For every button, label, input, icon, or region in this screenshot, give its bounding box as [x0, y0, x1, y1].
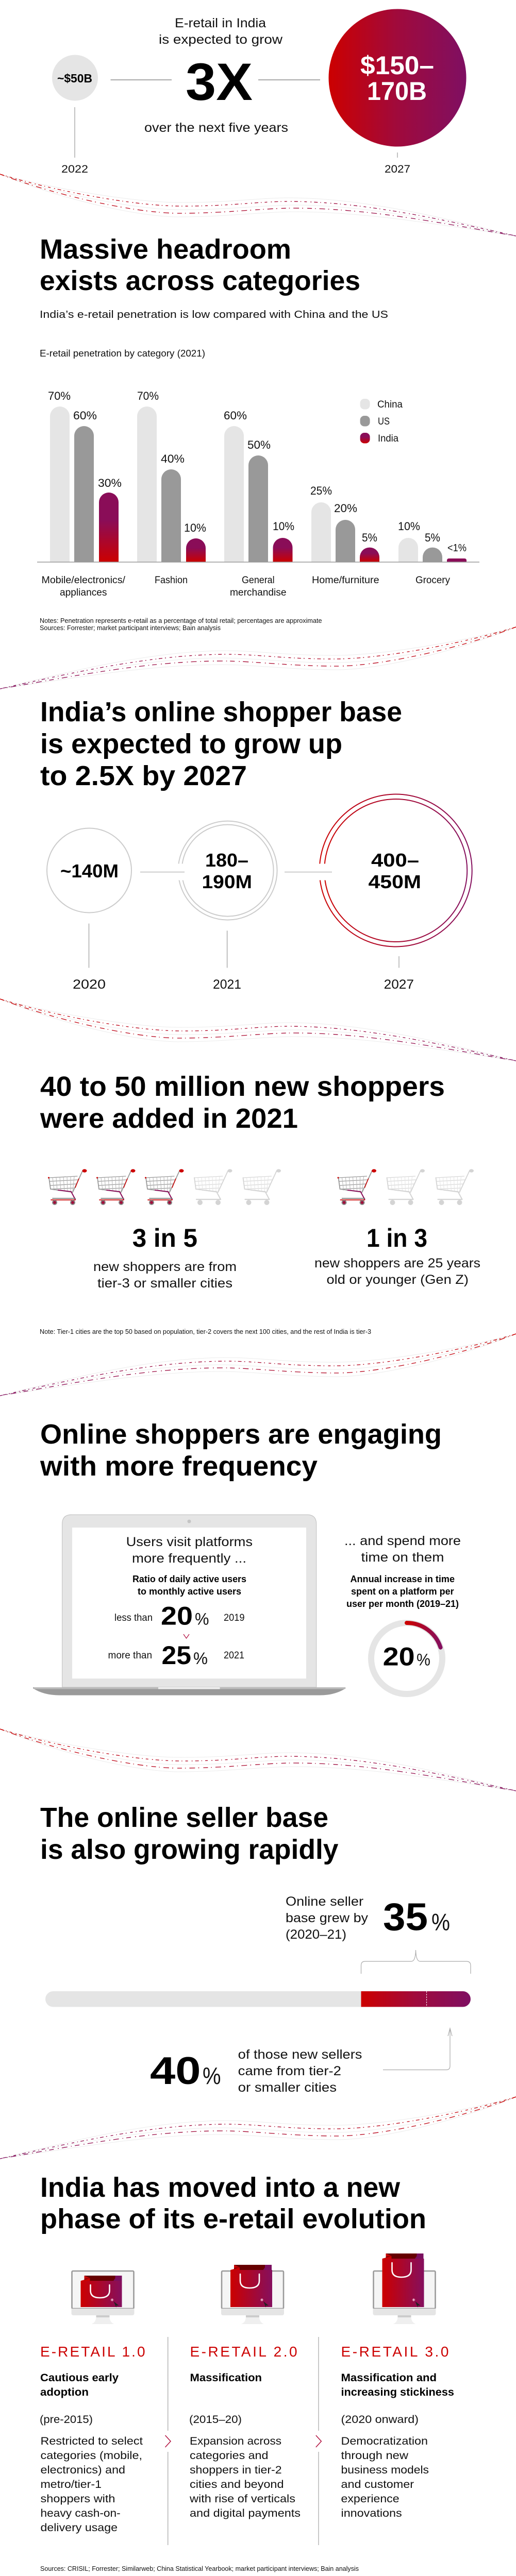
circle: 2020 [47, 828, 131, 913]
divider with arrow: 1.0 to 2.0 [165, 2337, 171, 2545]
description: categories (mobile, [40, 2450, 142, 2462]
year marker: 2027 [385, 152, 410, 175]
stat: 2021 ratio: more than [108, 1650, 152, 1661]
year marker: 2022 [61, 107, 88, 175]
circle: 2027 market size [329, 9, 466, 146]
text: seller growth: (2020–21) [286, 1927, 346, 1942]
legend: China [377, 399, 403, 410]
bars: general merchandise: 60% [224, 409, 247, 422]
heading: 40 to 50 million new shoppers [40, 1071, 445, 1102]
bars: fashion [137, 389, 206, 562]
legend [360, 399, 403, 444]
heading [40, 2172, 426, 2234]
subheading: cautious early adoption: Cautious early [40, 2372, 119, 2384]
heading: is also growing rapidly [40, 1834, 338, 1865]
text block: growth intro: E-retail in India [175, 16, 266, 30]
text block: visit frequency: Users visit platforms [126, 1535, 253, 1549]
stat: 35% [383, 1895, 450, 1939]
circle: 2027: 400– [371, 850, 419, 871]
bars: general merchandise: 10% [273, 520, 294, 533]
icon: monitor with large bag [373, 2253, 436, 2324]
heading [40, 234, 360, 296]
icon: monitor with medium bag [221, 2265, 284, 2324]
bars: general merchandise [224, 409, 294, 562]
label: e-retail 2.0: E-RETAIL 2.0 [190, 2344, 297, 2360]
description: through new [341, 2450, 409, 2462]
text: five years: over the next five years [144, 121, 288, 135]
text: tier-2 sellers: or smaller cities [238, 2080, 337, 2095]
category labels: Mobile/electronics/ [41, 575, 126, 586]
text block: time spent: time on them [361, 1550, 444, 1565]
stat: 3 in 5: 3 in 5 [132, 1224, 197, 1252]
stat: 2019 ratio: 2019 [224, 1613, 244, 1623]
bars: general merchandise: 50% [247, 438, 271, 451]
chart title: E-retail penetration by category (2021) [40, 348, 205, 359]
heading: India’s online shopper base [40, 697, 402, 727]
text block: time spent: spent on a platform per [351, 1586, 454, 1597]
category labels: Fashion [155, 575, 188, 586]
stat: 1 in 3: new shoppers are 25 years [314, 1256, 480, 1270]
panel: online shopper base [40, 697, 472, 992]
description [341, 2435, 429, 2519]
progress bar [45, 1991, 471, 2007]
year marker: 2021 [213, 930, 241, 992]
category labels: Home/furniture [312, 575, 379, 586]
panel: new shoppers [40, 1071, 480, 1335]
text block: growth intro: is expected to grow [159, 32, 283, 47]
circle: 2021: 180– [205, 850, 248, 871]
stat: 35%: % [431, 1909, 450, 1936]
panel: e-retail evolution [40, 2172, 454, 2572]
circle: 2021 [175, 821, 277, 920]
panel: 3X market growth [52, 9, 466, 175]
description: electronics) and [40, 2464, 125, 2476]
circle: 2027: 450M [368, 871, 421, 892]
bars: grocery: 10% [398, 520, 420, 533]
label: e-retail 3.0: E-RETAIL 3.0 [341, 2344, 448, 2360]
stat: 1 in 3: old or younger (Gen Z) [327, 1273, 469, 1287]
notes and sources: Sources: Forrester; market participant interviews; Bain analysis [40, 624, 221, 632]
text block: visit frequency: to monthly active users [138, 1586, 241, 1597]
text: seller growth: base grew by [286, 1911, 369, 1925]
bars: fashion: 70% [137, 389, 159, 402]
bars: mobile/electronics/appliances [48, 389, 122, 562]
connector: 2020 to 2021 [140, 872, 185, 873]
description: Democratization [341, 2435, 428, 2447]
donut chart: 20% [371, 1623, 442, 1694]
icon: 1 of 3 carts highlighted [337, 1169, 474, 1205]
description: Expansion across [190, 2435, 281, 2447]
arrow: chevron down [184, 1634, 189, 1638]
icon: 3 of 5 carts highlighted [48, 1169, 281, 1205]
description: shoppers with [40, 2493, 115, 2505]
period: (2015–20) [189, 2414, 242, 2426]
text block: time spent: user per month (2019–21) [346, 1599, 459, 1609]
stat: 1 in 3 [314, 1224, 480, 1287]
text block: visit frequency: more frequently ... [132, 1551, 246, 1566]
category labels: appliances [60, 587, 107, 598]
category labels: Grocery [415, 575, 450, 586]
stat: 2019 ratio [114, 1602, 244, 1631]
heading: The online seller base [40, 1802, 328, 1833]
subheading: cautious early adoption: adoption [40, 2386, 89, 2398]
subheading: massification and stickiness [341, 2372, 454, 2398]
description: experience [341, 2493, 400, 2505]
bars: grocery: 5% [425, 531, 440, 544]
subheading: massification: Massification [190, 2372, 262, 2384]
text block: time spent: ... and spend more [344, 1534, 461, 1548]
description: and digital payments [190, 2507, 301, 2519]
stat: 2021 ratio: % [193, 1649, 208, 1668]
description: delivery usage [40, 2522, 118, 2534]
heading: India has moved into a new [40, 2172, 401, 2203]
stat: 3 in 5 [93, 1224, 237, 1291]
column: e-retail 1.0 [40, 2271, 145, 2534]
text block: growth intro [159, 16, 283, 47]
description [189, 2435, 301, 2519]
circle: 2022 market size [52, 55, 98, 101]
subheading: massification and stickiness: Massification and [341, 2372, 437, 2384]
circle: 2027 [317, 794, 472, 947]
connector: left [110, 79, 172, 80]
bars: fashion: 10% [184, 521, 206, 534]
bars: home/furniture [310, 484, 379, 562]
description [40, 2435, 143, 2534]
circle: 2027 market size: 170B [367, 77, 427, 106]
bars: grocery: <1% [447, 543, 467, 554]
note: Note: Tier-1 cities are the top 50 based on population, tier-2 covers the next 100 cities, and the rest of India is tier-3 [40, 1328, 371, 1335]
connector: 2021 to 2027 [285, 872, 332, 873]
year marker: 2022: 2022 [61, 163, 88, 175]
description: metro/tier-1 [40, 2479, 102, 2490]
bars: home/furniture: 20% [334, 502, 357, 515]
stat: 2019 ratio: 20 [161, 1602, 193, 1631]
bars: mobile/electronics/appliances: 30% [98, 477, 122, 489]
big number: 3X: 3X [186, 53, 253, 111]
year marker: 2020: 2020 [73, 977, 106, 992]
heading [40, 697, 402, 791]
stat: 2021 ratio [108, 1641, 244, 1670]
subheading: India’s e-retail penetration is low compared with China and the US [40, 309, 388, 320]
heading: were added in 2021 [40, 1103, 298, 1134]
circle: 2022 market size: ~$50B [57, 72, 92, 85]
year marker: 2021: 2021 [213, 977, 241, 992]
category labels [41, 575, 450, 598]
description: business models [341, 2464, 429, 2476]
description: shoppers in tier-2 [190, 2464, 282, 2476]
heading: phase of its e-retail evolution [40, 2204, 426, 2234]
stat: 3 in 5: tier-3 or smaller cities [97, 1276, 232, 1291]
stat: 35%: 35 [383, 1895, 428, 1939]
heading: Online shoppers are engaging [40, 1419, 442, 1450]
year marker: 2020 [73, 924, 106, 992]
label: e-retail 1.0: E-RETAIL 1.0 [40, 2344, 145, 2360]
description: cities and beyond [190, 2479, 284, 2490]
bars: home/furniture: 25% [310, 484, 332, 497]
bracket [361, 1950, 471, 1974]
stat: 40%: 40 [150, 2049, 201, 2092]
text: seller growth [286, 1894, 369, 1942]
icon: monitor with small bag [71, 2271, 134, 2324]
stat: 2021 ratio: 25 [162, 1641, 191, 1670]
category labels: merchandise [230, 587, 287, 598]
text block: time spent [344, 1534, 461, 1609]
column: e-retail 3.0 [341, 2253, 454, 2519]
bars: home/furniture: 5% [362, 531, 377, 544]
year marker: 2027 [384, 956, 414, 992]
column: e-retail 2.0 [189, 2265, 301, 2519]
heading: to 2.5X by 2027 [40, 760, 247, 791]
divider with arrow: 2.0 to 3.0 [316, 2337, 321, 2545]
legend: US [378, 416, 390, 427]
text block: time spent: Annual increase in time [351, 1574, 455, 1584]
description: Restricted to select [40, 2435, 143, 2447]
heading: is expected to grow up [40, 728, 342, 759]
description: heavy cash-on- [40, 2507, 121, 2519]
text block: visit frequency: Ratio of daily active users [132, 1574, 246, 1584]
stat: 2021 ratio: 2021 [224, 1650, 244, 1661]
description: with rise of verticals [189, 2493, 295, 2505]
stat: 2019 ratio: less than [114, 1613, 153, 1623]
bars: mobile/electronics/appliances: 60% [73, 409, 97, 422]
notes and sources: Notes: Penetration represents e-retail as a percentage of total retail; percentages are approximate [40, 617, 322, 624]
circle: 2021: 190M [202, 871, 252, 892]
heading: exists across categories [40, 265, 360, 296]
panel: engagement frequency [33, 1419, 461, 1695]
text block: visit frequency [126, 1535, 253, 1597]
heading: with more frequency [40, 1451, 318, 1482]
sources: Sources: CRISIL; Forrester; Similarweb; China Statistical Yearbook; market participant interviews; Bain analysis [40, 2565, 359, 2572]
connector: right [258, 79, 320, 80]
period: (2020 onward) [341, 2414, 419, 2426]
donut chart: 20%: % [417, 1651, 430, 1669]
text: tier-2 sellers: of those new sellers [238, 2047, 362, 2062]
description: and customer [341, 2479, 414, 2490]
panel: seller base [40, 1802, 471, 2095]
icon: laptop [33, 1515, 345, 1695]
category labels: General [242, 575, 275, 586]
subheading: cautious early adoption [40, 2372, 119, 2398]
stat: 40%: % [203, 2062, 221, 2089]
heading [40, 1071, 445, 1134]
heading [40, 1802, 338, 1865]
legend: India [378, 433, 398, 444]
bars: mobile/electronics/appliances: 70% [48, 389, 71, 402]
description: categories and [190, 2450, 268, 2462]
text: tier-2 sellers: came from tier-2 [238, 2064, 341, 2078]
donut chart: 20%: 20 [383, 1642, 415, 1671]
stat: 2019 ratio: % [195, 1610, 209, 1629]
circle: 2020: ~140M [60, 860, 119, 882]
subheading: massification and stickiness: increasing stickiness [341, 2386, 454, 2398]
bar chart [37, 389, 479, 598]
year marker: 2027: 2027 [385, 163, 410, 175]
heading: Massive headroom [40, 234, 291, 265]
text: tier-2 sellers [238, 2047, 362, 2095]
bars: grocery [398, 520, 467, 562]
heading [40, 1419, 442, 1482]
circle: 2027 market size: $150– [360, 51, 434, 80]
notes and sources [40, 617, 322, 632]
panel: headroom by category [37, 234, 479, 632]
year marker: 2027: 2027 [384, 977, 414, 992]
bars: fashion: 40% [161, 452, 185, 465]
text: seller growth: Online seller [286, 1894, 363, 1909]
description: innovations [341, 2507, 402, 2519]
stat: 1 in 3: 1 in 3 [367, 1224, 427, 1252]
period: (pre-2015) [40, 2414, 93, 2426]
stat: 40% [150, 2049, 221, 2092]
stat: 3 in 5: new shoppers are from [93, 1260, 237, 1274]
arrow: to bar [383, 2028, 452, 2070]
